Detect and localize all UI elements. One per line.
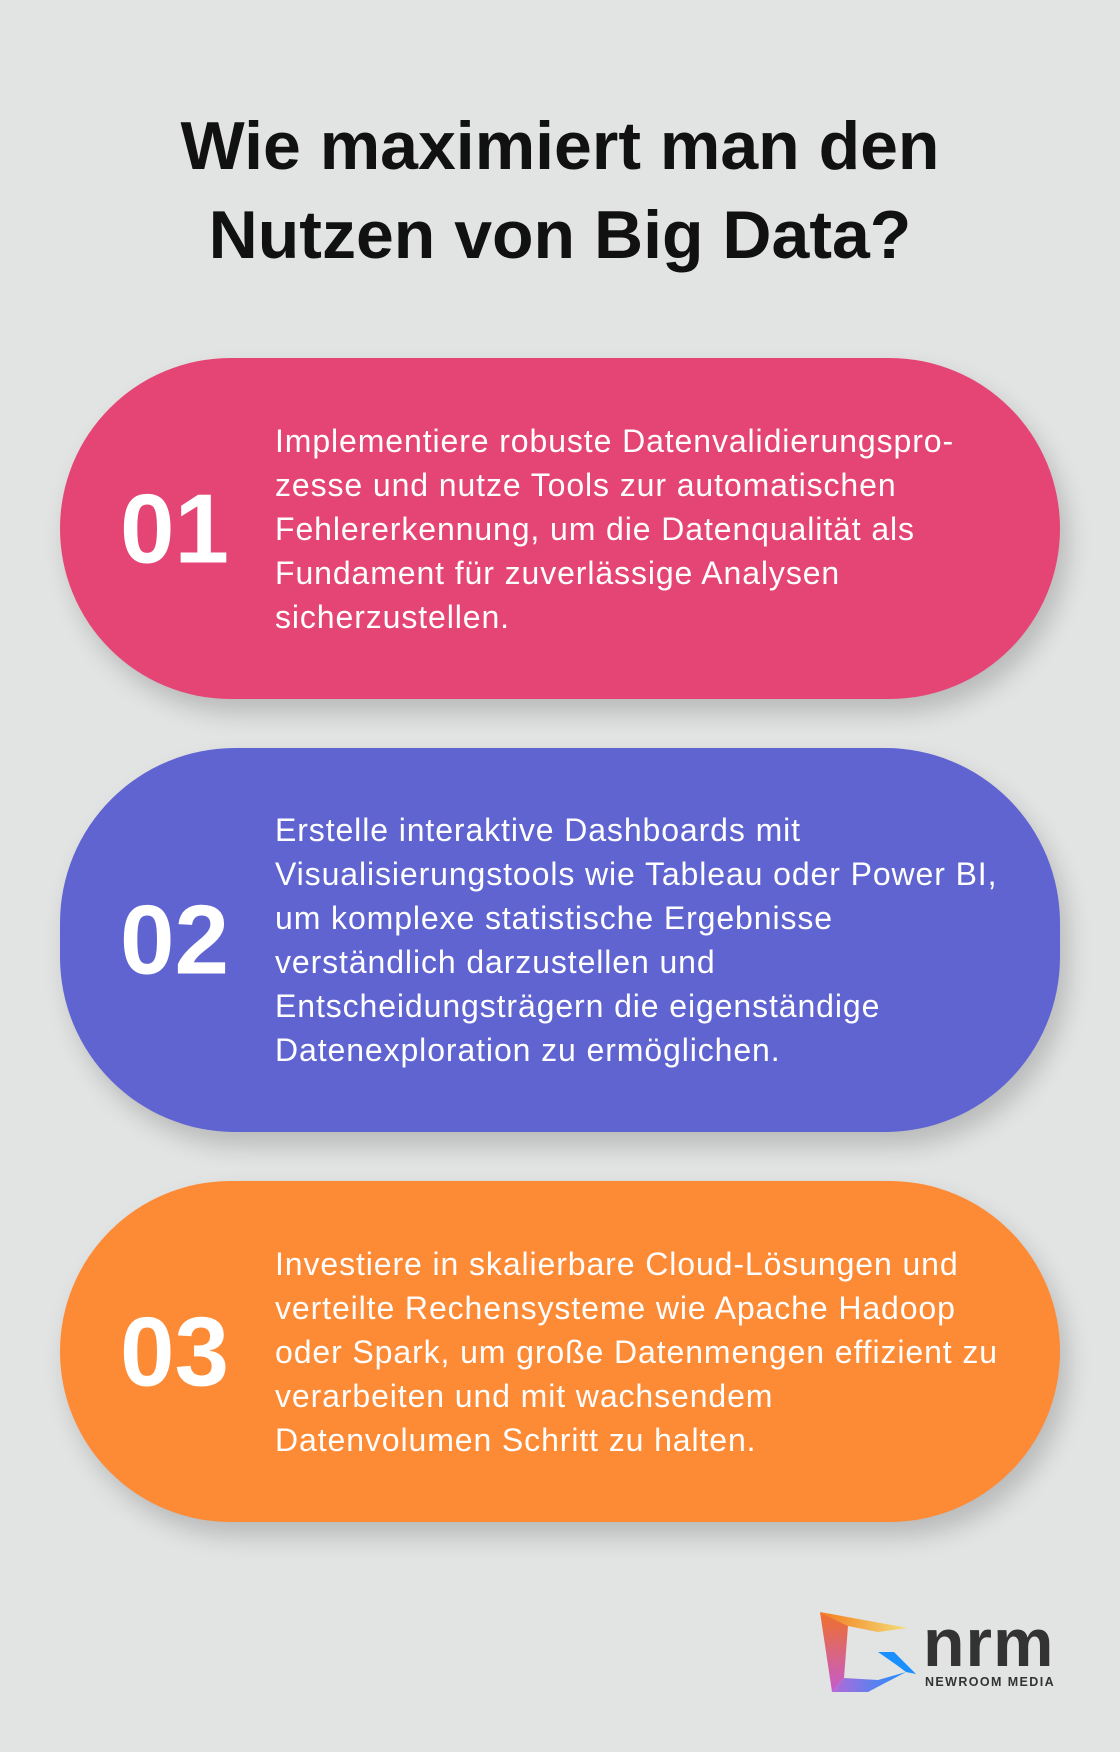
number 03: 03 — [120, 1296, 229, 1406]
number 02: 02 — [120, 884, 229, 994]
panel: step 01 — [60, 358, 1060, 699]
text 03 — [275, 1246, 998, 1458]
text 03: verarbeiten und mit wachsendem — [275, 1378, 773, 1414]
text 03: Datenvolumen Schritt zu halten. — [275, 1422, 756, 1458]
title — [180, 108, 939, 273]
logo: NEWROOM MEDIA — [925, 1675, 1055, 1689]
text 02: Entscheidungsträgern die eigenständige — [275, 988, 880, 1024]
text 03: oder Spark, um große Datenmengen effizient zu — [275, 1334, 998, 1370]
text 02: Erstelle interaktive Dashboards mit — [275, 812, 801, 848]
text 03: verteilte Rechensysteme wie Apache Hadoop — [275, 1290, 956, 1326]
icon: logo mark — [820, 1612, 916, 1692]
text 01: zesse und nutze Tools zur automatischen — [275, 466, 897, 502]
text 02: verständlich darzustellen und — [275, 944, 716, 980]
text 02: Datenexploration zu ermöglichen. — [275, 1032, 781, 1068]
text 01: Fehlererkennung, um die Datenqualität als — [275, 510, 915, 546]
title: Wie maximiert man den — [181, 108, 939, 184]
text 02: um komplexe statistische Ergebnisse — [275, 900, 833, 936]
logo — [820, 1605, 1055, 1692]
text 01 — [275, 422, 954, 634]
text 03: Investiere in skalierbare Cloud-Lösungen und — [275, 1246, 959, 1282]
text 01: Fundament für zuverlässige Analysen — [275, 554, 840, 590]
title: Nutzen von Big Data? — [209, 197, 911, 273]
text 01: Implementiere robuste Datenvalidierungspro- — [275, 422, 954, 458]
panel: step 03 — [60, 1181, 1060, 1522]
text 02: Visualisierungstools wie Tableau oder Power BI, — [275, 856, 997, 892]
number 01: 01 — [120, 473, 229, 583]
logo text: nrm — [923, 1605, 1054, 1681]
panel: step 02 — [60, 748, 1060, 1132]
text 02 — [275, 812, 997, 1068]
text 01: sicherzustellen. — [275, 598, 510, 634]
